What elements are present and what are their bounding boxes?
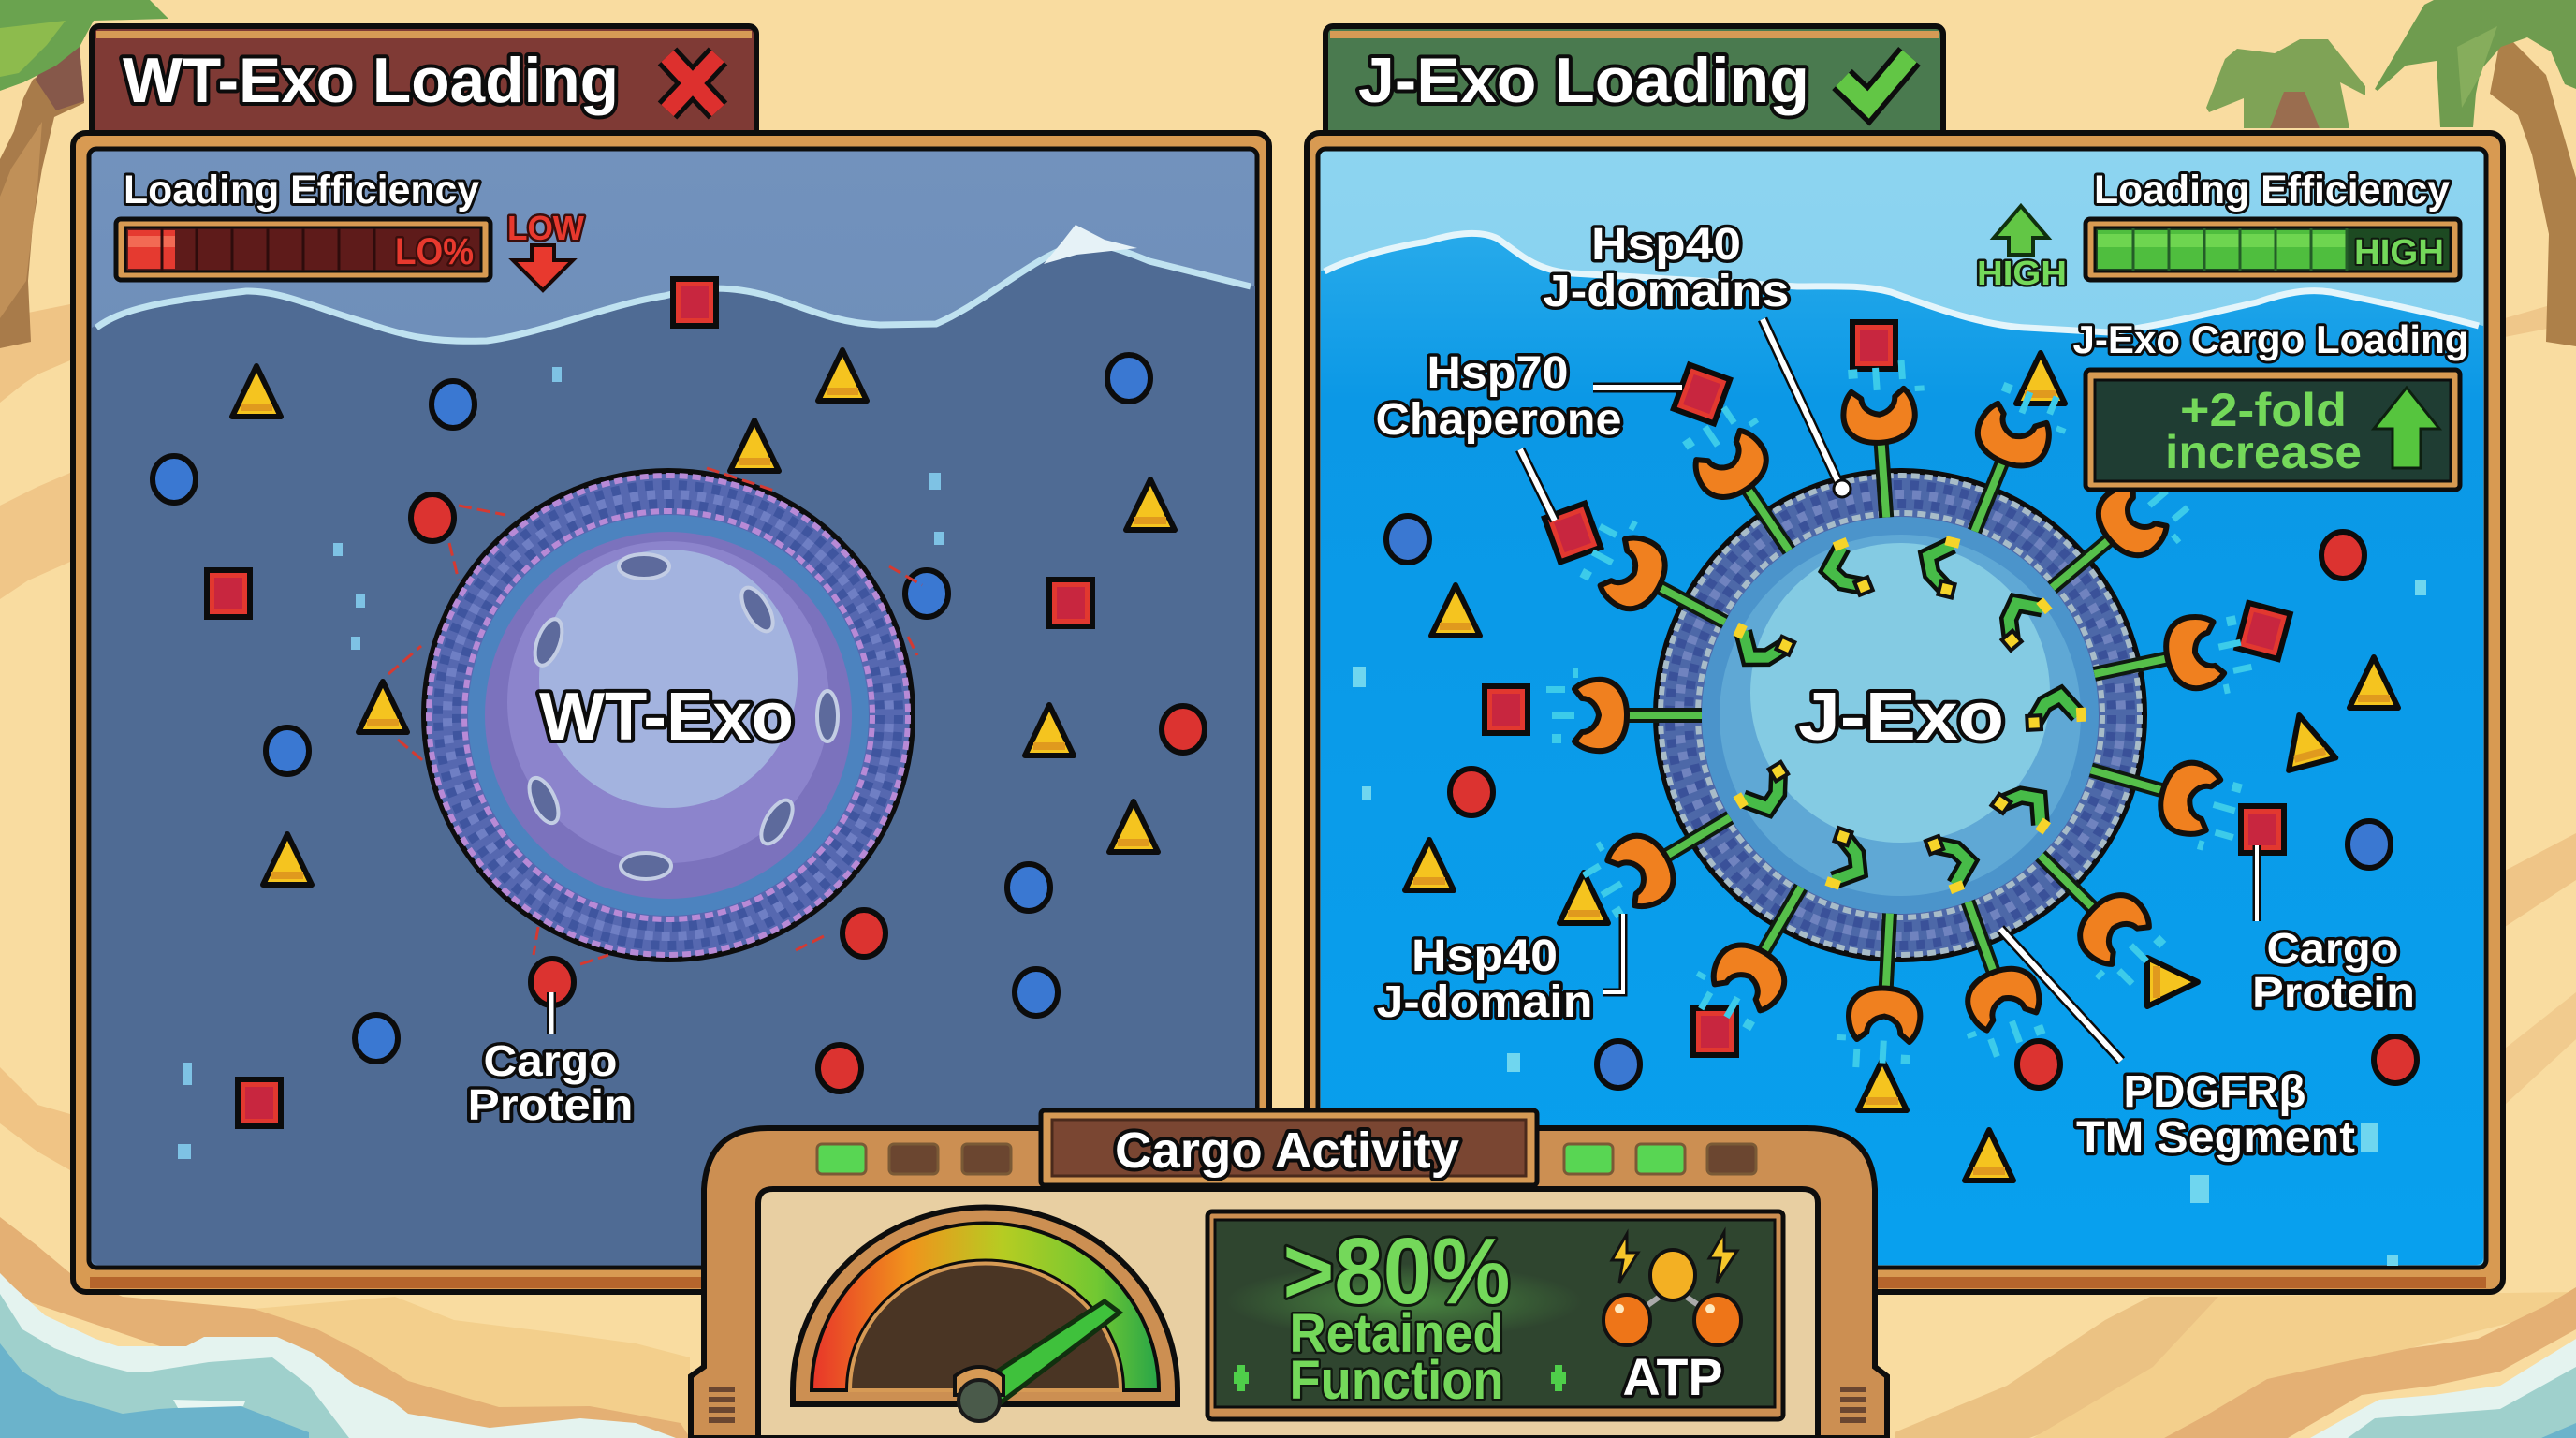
callout: J-Exo cargo loading [2072,317,2469,490]
cargo proteins [153,279,1205,1126]
label: PDGFRβ TM Segment: TM Segment [2076,1113,2355,1163]
wave crest [96,244,1251,341]
panel water [92,244,1255,1265]
sea: bottom right shore [2310,1339,2576,1438]
tab title: J-Exo Loading [1358,45,1809,116]
label: PDGFRβ TM Segment [2000,929,2355,1163]
J-Exo label: J-Exo [1798,680,2004,755]
icon: green check [1842,56,1910,105]
gauge bar [2086,219,2460,280]
display: retained function: Function [1290,1350,1503,1411]
label: PDGFRβ TM Segment: PDGFRβ [2123,1067,2306,1117]
palm tree: top right small [2206,39,2365,128]
high arrow: HIGH [1977,254,2067,292]
low arrow: LOW [507,209,584,247]
label: Hsp40 J-domains: J-domains [1543,267,1790,316]
palm tree: top right large [2375,0,2576,346]
vent grills [709,1387,1866,1423]
stat caption: Retained [1290,1303,1503,1364]
water sparkles [178,367,944,1159]
console tab [1041,1110,1537,1185]
gauge: cargo activity [793,1208,1178,1421]
label: Hsp70 Chaperone: Hsp70 [1427,348,1569,398]
gauge value: LO% [395,231,474,272]
low arrow [507,209,584,290]
label: Hsp70 Chaperone [1376,348,1682,521]
gauge title: Loading Efficiency [2094,168,2450,213]
icon: red cross [667,56,718,110]
wave crest [1325,233,2479,332]
label: Cargo Protein: Cargo [2267,924,2398,973]
exosome: J-Exo [1546,359,2256,1070]
panel frame [73,133,1269,1292]
efficiency gauge: low [116,168,490,280]
tab: J-Exo Loading [1325,26,1943,139]
high arrow [1977,206,2067,292]
label: Hsp40 J-domain: Hsp40 [1412,932,1558,981]
efficiency gauge: high [2086,168,2460,280]
label: cargo protein: Protein [468,1080,633,1129]
label: cargo protein [468,992,633,1129]
panel water surface [89,149,1257,1268]
console tab: Cargo Activity [1115,1123,1459,1179]
label: Cargo Protein: Protein [2252,968,2415,1017]
callout: J-Exo cargo loading: increase [2165,426,2362,478]
label: Cargo Protein [2252,845,2415,1017]
label: cargo protein: Cargo [483,1036,618,1085]
tab: WT-Exo Loading [92,26,756,139]
callout: J-Exo cargo loading: +2-fold [2180,384,2347,436]
indicator lights [817,1144,1756,1174]
label: Hsp40 J-domain [1376,914,1623,1027]
console body [691,1128,1887,1438]
label: Hsp40 J-domain: J-domain [1376,977,1593,1027]
repelled cargo marks [388,468,922,964]
callout: J-Exo cargo loading: J-Exo Cargo Loading [2072,317,2469,361]
icon: ATP molecule [1603,1232,1741,1345]
gauge needle [964,1301,1120,1409]
panel: cargo activity console [691,1110,1887,1438]
ATP label: ATP [1623,1347,1722,1406]
foam [1044,225,1137,264]
sand band: lower left [254,1297,690,1438]
gauge bar [116,219,490,280]
needle hub [955,1367,1003,1421]
console screen [758,1189,1818,1438]
sand band: upper right [1895,1297,2227,1438]
gauge title: Loading Efficiency [124,168,479,213]
exosome: WT-Exo [421,468,915,962]
sparkles [1234,1365,1566,1391]
display glow [1226,1264,1582,1339]
engineered arms with claws [1546,359,2256,1070]
gauge value: HIGH [2354,233,2444,272]
J-domains [1727,533,2086,896]
panel frame [1307,133,2503,1292]
panel: WT-Exo [73,133,1269,1292]
WT-Exo label: WT-Exo [539,680,794,755]
tab title: WT-Exo Loading [123,45,619,116]
panel water surface [1318,149,2486,1268]
panel: J-Exo [1307,133,2503,1292]
palm tree: top left [0,0,168,348]
display: retained function [1208,1211,1783,1419]
sea: bottom left shore [0,1273,676,1438]
label: Hsp40 J-domains [1543,220,1851,497]
cargo proteins [1386,322,2417,1181]
panel water [1321,233,2483,1265]
stat value: >80% [1282,1219,1511,1324]
label: Hsp70 Chaperone: Chaperone [1376,395,1621,445]
water sparkles [1353,580,2426,1266]
icon: up arrow [2374,388,2439,468]
label: Hsp40 J-domains: Hsp40 [1591,220,1741,270]
